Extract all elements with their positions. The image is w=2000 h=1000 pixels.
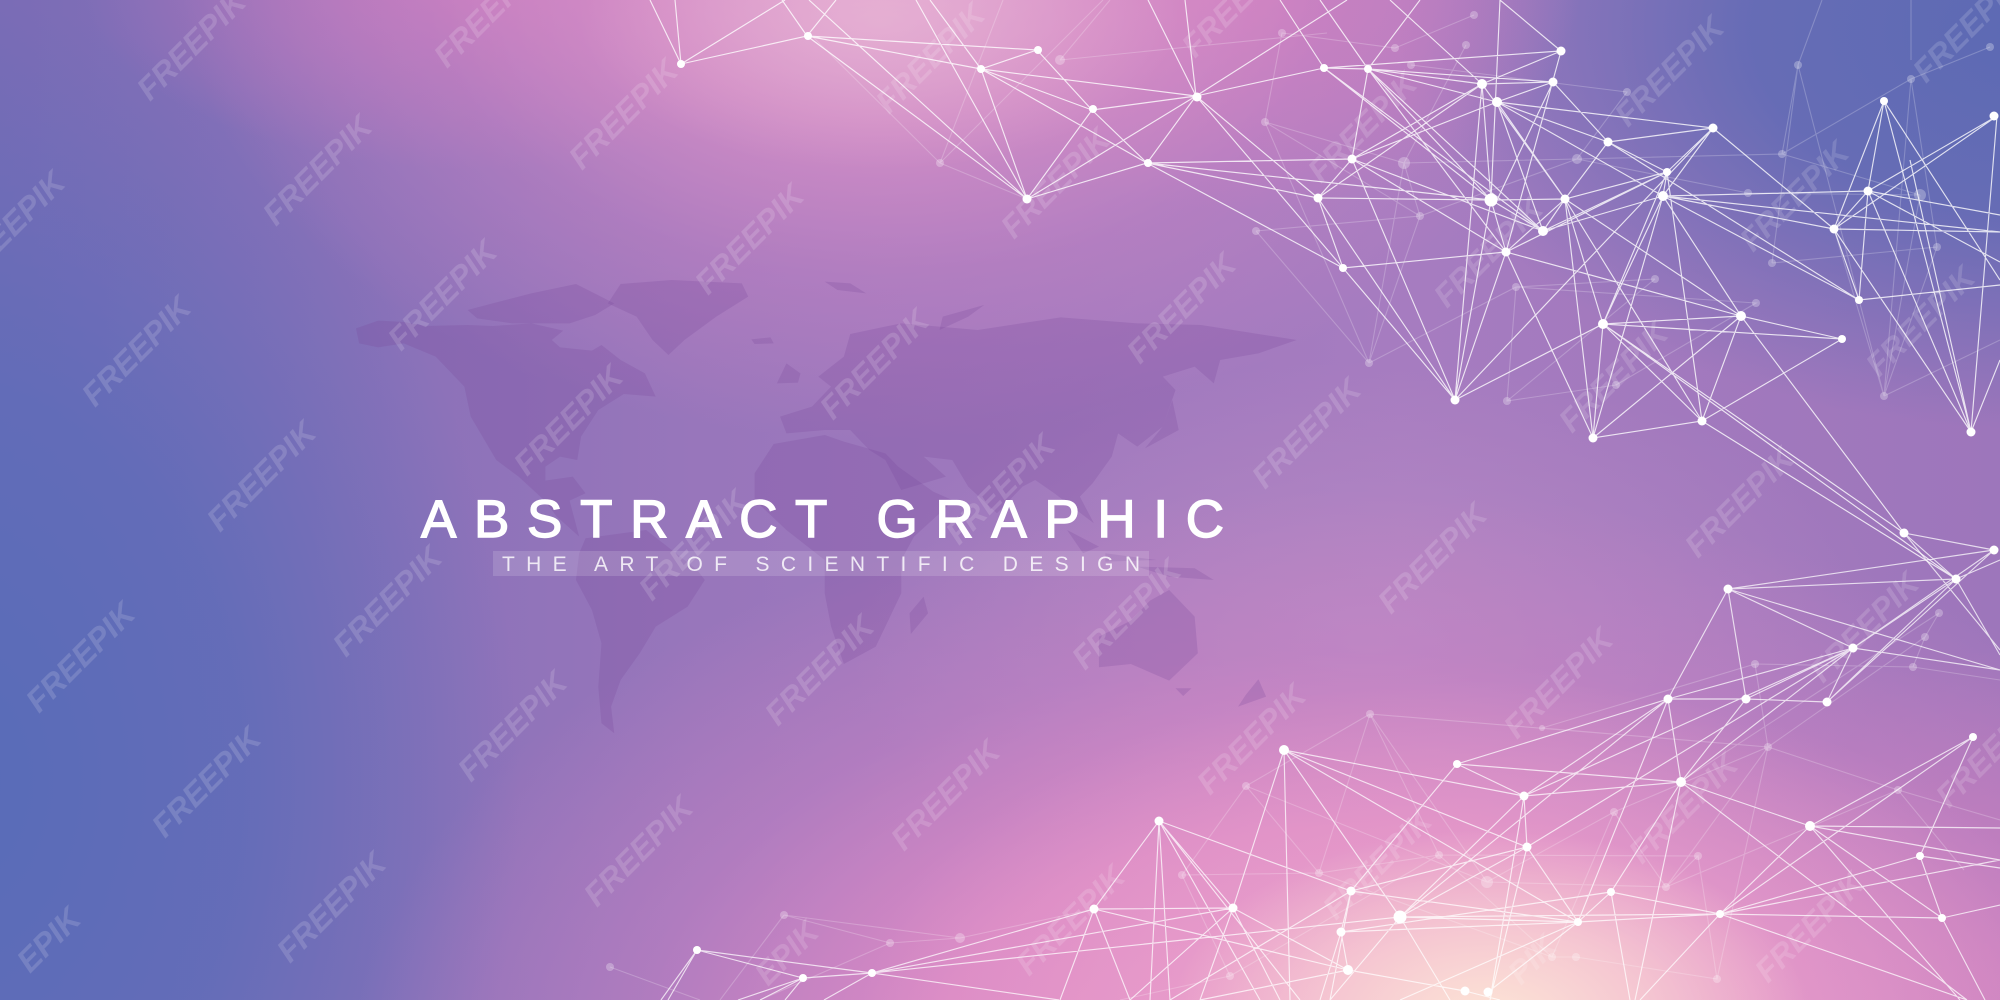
FREEPIK watermarks: FREEPIK xyxy=(938,425,1064,551)
FREEPIK watermarks: EPIK xyxy=(747,912,828,992)
FREEPIK watermarks: FREEPIK xyxy=(883,731,1009,857)
Africa xyxy=(755,435,954,664)
FREEPIK watermarks: FREEPIK xyxy=(144,718,270,844)
North America xyxy=(356,321,656,537)
FREEPIK watermarks: FREEPIK xyxy=(1370,494,1496,620)
FREEPIK watermarks: FREEPIK xyxy=(757,606,883,732)
FREEPIK watermarks: FREEPIK xyxy=(868,0,994,120)
lower network nodes xyxy=(693,528,1998,996)
FREEPIK watermarks: FREEPIK xyxy=(325,537,451,663)
FREEPIK watermarks: FREEPIK xyxy=(1008,856,1134,982)
FREEPIK watermarks: FREEPIK xyxy=(18,593,144,719)
FREEPIK watermarks: FREEPIK xyxy=(1858,257,1984,383)
FREEPIK watermarks: FREEPIK xyxy=(1426,188,1552,314)
FREEPIK watermarks: FREEPIK xyxy=(1315,800,1441,926)
faint nodes xyxy=(606,11,1994,983)
subtitle: THE ART OF SCIENTIFIC DESIGN xyxy=(502,553,1140,576)
lower network lines xyxy=(661,533,2000,1000)
FREEPIK watermarks: FREEPIK xyxy=(561,50,687,176)
FREEPIK watermarks: FREEPIK xyxy=(576,787,702,913)
FREEPIK watermarks: FREEPIK xyxy=(1732,132,1858,258)
FREEPIK watermarks: FREEPIK xyxy=(687,175,813,301)
FREEPIK watermarks: FREEPIK xyxy=(506,356,632,482)
Australia xyxy=(1099,590,1198,681)
FREEPIK watermarks: FREEPIK xyxy=(1496,619,1622,745)
Madagascar xyxy=(910,597,928,634)
upper network lines xyxy=(650,0,2000,579)
FREEPIK watermarks: FREEPIK xyxy=(1064,550,1190,676)
Japan xyxy=(1145,400,1179,448)
FREEPIK watermarks: FREEPIK xyxy=(1244,369,1370,495)
upper network nodes xyxy=(677,32,1998,442)
FREEPIK watermarks: EPIK xyxy=(9,899,90,979)
faint background network xyxy=(606,0,2000,1000)
FREEPIK watermarks: FREEPIK xyxy=(1119,244,1245,370)
FREEPIK watermarks: FREEPIK xyxy=(450,662,576,788)
New Zealand xyxy=(1238,679,1266,707)
FREEPIK watermarks: FREEPIK xyxy=(1300,63,1426,189)
Britain xyxy=(777,363,800,383)
world map silhouette xyxy=(356,280,1297,733)
South America xyxy=(576,530,705,733)
FREEPIK watermarks: FREEPIK xyxy=(993,119,1119,245)
FREEPIK watermarks: FREEPIK xyxy=(255,106,381,232)
Eurasia xyxy=(780,317,1297,523)
Canadian Arctic islands xyxy=(468,284,614,323)
FREEPIK watermarks: FREEPIK xyxy=(1621,744,1747,870)
subtitle band xyxy=(493,551,1149,576)
FREEPIK watermarks: FREEPIK xyxy=(812,300,938,426)
FREEPIK watermarks: FREEPIK xyxy=(631,481,757,607)
Indonesia and New Guinea xyxy=(1067,530,1214,580)
FREEPIK watermarks: FREEPIK xyxy=(380,231,506,357)
FREEPIK watermarks: FREEPIK xyxy=(199,412,325,538)
Svalbard and Novaya Zemlya xyxy=(825,282,984,330)
FREEPIK watermarks: FREEPIK xyxy=(1607,7,1733,133)
FREEPIK watermarks: FREEPIK xyxy=(1551,313,1677,439)
FREEPIK watermarks: FREEPIK xyxy=(1677,438,1803,564)
FREEPIK watermarks: FREEPIK xyxy=(1802,563,1928,689)
FREEPIK watermarks: FREEPIK xyxy=(1747,863,1873,989)
FREEPIK watermarks: FREEPIK xyxy=(269,843,395,969)
Greenland xyxy=(608,280,748,355)
Tasmania xyxy=(1176,688,1191,696)
FREEPIK watermarks: FREEPIK xyxy=(1189,675,1315,801)
FREEPIK watermarks: PIK xyxy=(1500,926,1566,991)
FREEPIK watermarks: FREEPIK xyxy=(74,287,200,413)
title: ABSTRACT GRAPHIC xyxy=(421,490,1224,549)
Iceland xyxy=(751,337,774,344)
